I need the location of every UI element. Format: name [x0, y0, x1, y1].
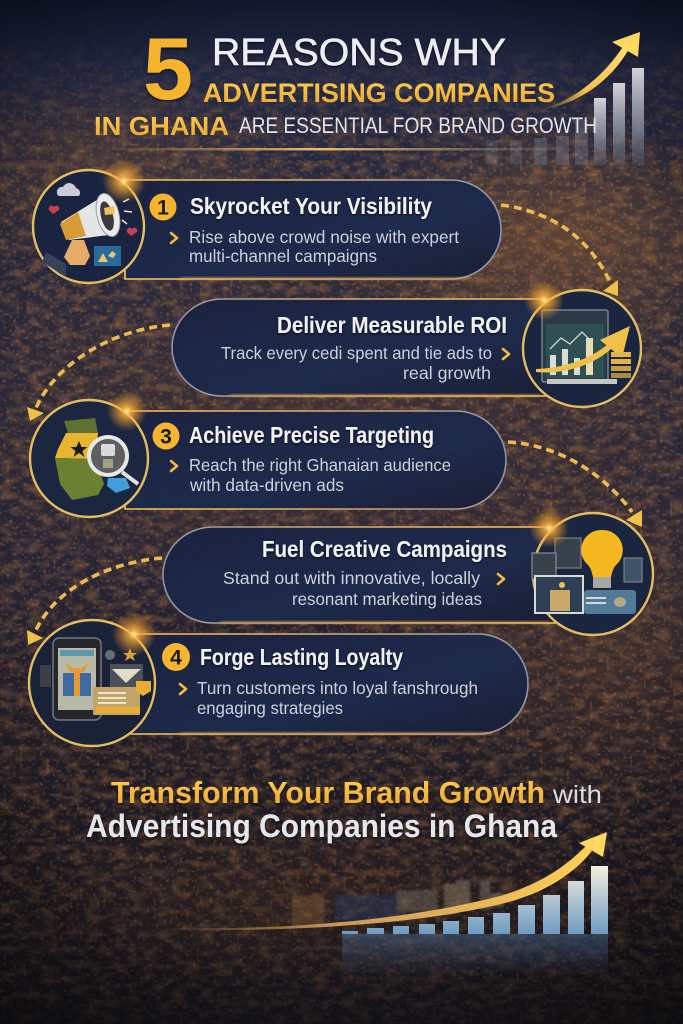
title: REASONS WHY	[212, 32, 506, 74]
icon: megaphone	[33, 170, 144, 283]
body text 4	[223, 568, 482, 609]
heading 3: Achieve Precise Targeting	[189, 422, 434, 448]
glow sparks on circle joints	[102, 159, 569, 656]
body text 2: Track every cedi spent and tie ads to	[221, 343, 492, 363]
dashed connector 1 to 2	[501, 205, 618, 296]
body text 1	[189, 227, 459, 266]
chevron 4	[498, 574, 504, 584]
body text 4: Stand out with innovative, locally	[223, 568, 480, 588]
panel 1: skyrocket your visibility	[125, 180, 501, 280]
closing headline: Transform Your Brand Growth	[111, 775, 545, 810]
chevron 3	[171, 461, 177, 471]
panel 3: achieve precise targeting	[125, 411, 506, 509]
dashed connector 2 to 3	[27, 325, 170, 421]
body text 2	[221, 343, 492, 383]
title	[94, 19, 597, 141]
body text 1: multi-channel campaigns	[189, 246, 377, 266]
icon: light bulb and creative cards	[532, 513, 653, 635]
heading 4: Fuel Creative Campaigns	[262, 536, 507, 562]
title: IN GHANA	[94, 111, 229, 141]
chevron 5	[180, 684, 186, 694]
body text 5: engaging strategies	[197, 698, 343, 718]
body text 2: real growth	[403, 363, 491, 383]
heading 5: Forge Lasting Loyalty	[200, 644, 403, 670]
number badge 1: 1	[157, 196, 169, 220]
body text 4: resonant marketing ideas	[292, 589, 482, 609]
title: ADVERTISING COMPANIES	[203, 78, 555, 108]
background city blocks behind bottom chart	[292, 880, 504, 926]
body text 5	[197, 678, 478, 718]
chevron 2	[503, 349, 509, 359]
number badge 1	[150, 194, 176, 220]
icon: Ghana map with magnifier	[30, 400, 148, 517]
panel 2: deliver measurable ROI	[172, 299, 560, 397]
number badge 3	[152, 422, 180, 450]
top growth chart with arrow	[486, 32, 644, 165]
dashed connector 3 to 4	[508, 442, 642, 527]
icon: analytics laptop	[523, 290, 641, 407]
panel 4: fuel creative campaigns	[163, 527, 555, 624]
chevron 1	[171, 233, 177, 243]
panel 5: forge lasting loyalty	[130, 634, 528, 735]
closing headline	[86, 775, 602, 844]
body text 3: with data-driven ads	[189, 475, 344, 495]
body text 5: Turn customers into loyal fanshrough	[197, 678, 478, 698]
bottom growth chart with arrow	[160, 832, 608, 976]
title: ARE ESSENTIAL FOR BRAND GROWTH	[239, 113, 597, 138]
body text 3: Reach the right Ghanaian audience	[189, 455, 451, 475]
number badge 4 on loyalty panel: 4	[170, 646, 182, 670]
body text 1: Rise above crowd noise with expert	[189, 227, 459, 247]
heading 2: Deliver Measurable ROI	[277, 312, 507, 338]
closing headline: with	[552, 781, 602, 809]
closing headline: Advertising Companies in Ghana	[86, 808, 557, 844]
heading 1: Skyrocket Your Visibility	[190, 193, 432, 219]
dashed connector 4 to 5	[27, 558, 162, 645]
icon: phone with gift and messages	[29, 620, 155, 746]
number badge 4 on loyalty panel	[162, 643, 190, 671]
body text 3	[189, 455, 451, 495]
number badge 3: 3	[160, 426, 172, 448]
title: 5	[143, 19, 193, 118]
